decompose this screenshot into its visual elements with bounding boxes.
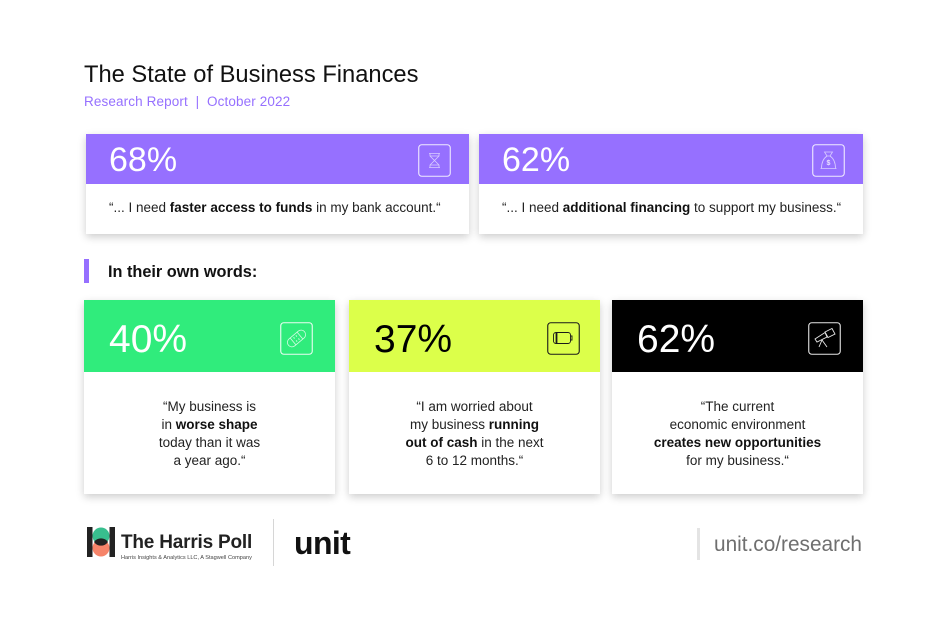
panel: running out of cash stat <box>349 300 600 494</box>
panel: additional financing stat <box>479 134 863 234</box>
stat header <box>84 300 335 372</box>
logo mark <box>87 527 115 557</box>
quote text: a year ago.“ <box>173 453 246 468</box>
stat header <box>612 300 863 372</box>
stat header <box>479 134 863 184</box>
stat number: 62% <box>502 141 570 179</box>
quote text: today than it was <box>159 435 260 450</box>
quote text: “... I need additional financing to support my business.“ <box>502 200 841 215</box>
heading accent bar <box>84 259 89 283</box>
quote text: “The current <box>701 399 774 414</box>
stat number: 40% <box>109 318 187 361</box>
heading text: In their own words: <box>108 263 257 281</box>
quote text: in worse shape <box>161 417 258 432</box>
icon: money bag: $ <box>827 160 831 167</box>
panel: worse shape stat <box>84 300 335 494</box>
quote text: 6 to 12 months.“ <box>426 453 523 468</box>
quote text: “... I need faster access to funds in my bank account.“ <box>109 200 441 215</box>
section heading <box>84 259 257 283</box>
stat number: 68% <box>109 141 177 179</box>
icon: hourglass <box>418 144 451 177</box>
icon: telescope <box>808 322 841 355</box>
quote text: economic environment <box>670 417 805 432</box>
quote text: out of cash in the next <box>405 435 544 450</box>
panel: faster access stat <box>86 134 469 234</box>
icon: low battery <box>547 322 580 355</box>
icon: bandage <box>280 322 313 355</box>
title: The State of Business Finances <box>84 62 418 88</box>
quote text <box>654 399 821 468</box>
logo tagline: Harris Insights & Analytics LLC, A Stagwell Company <box>121 555 252 561</box>
quote text: for my business.“ <box>686 453 789 468</box>
quote text: my business running <box>410 417 539 432</box>
url accent bar <box>697 528 700 560</box>
quote text: creates new opportunities <box>654 435 821 450</box>
logo: The Harris Poll <box>87 527 252 561</box>
panel: new opportunities stat <box>612 300 863 494</box>
quote text: “My business is <box>163 399 256 414</box>
stat number: 62% <box>637 318 715 361</box>
stat header <box>86 134 469 184</box>
stat number: 37% <box>374 318 452 361</box>
url callout <box>697 528 862 560</box>
icon: money bag <box>812 144 845 177</box>
quote text <box>159 399 260 468</box>
logo: unit: unit <box>294 525 350 561</box>
subtitle: Research Report | October 2022 <box>84 94 290 109</box>
quote text: “I am worried about <box>416 399 533 414</box>
stat header <box>349 300 600 372</box>
url text: unit.co/research <box>714 533 862 556</box>
wordmark: The Harris Poll <box>121 532 252 553</box>
quote text <box>405 399 544 468</box>
